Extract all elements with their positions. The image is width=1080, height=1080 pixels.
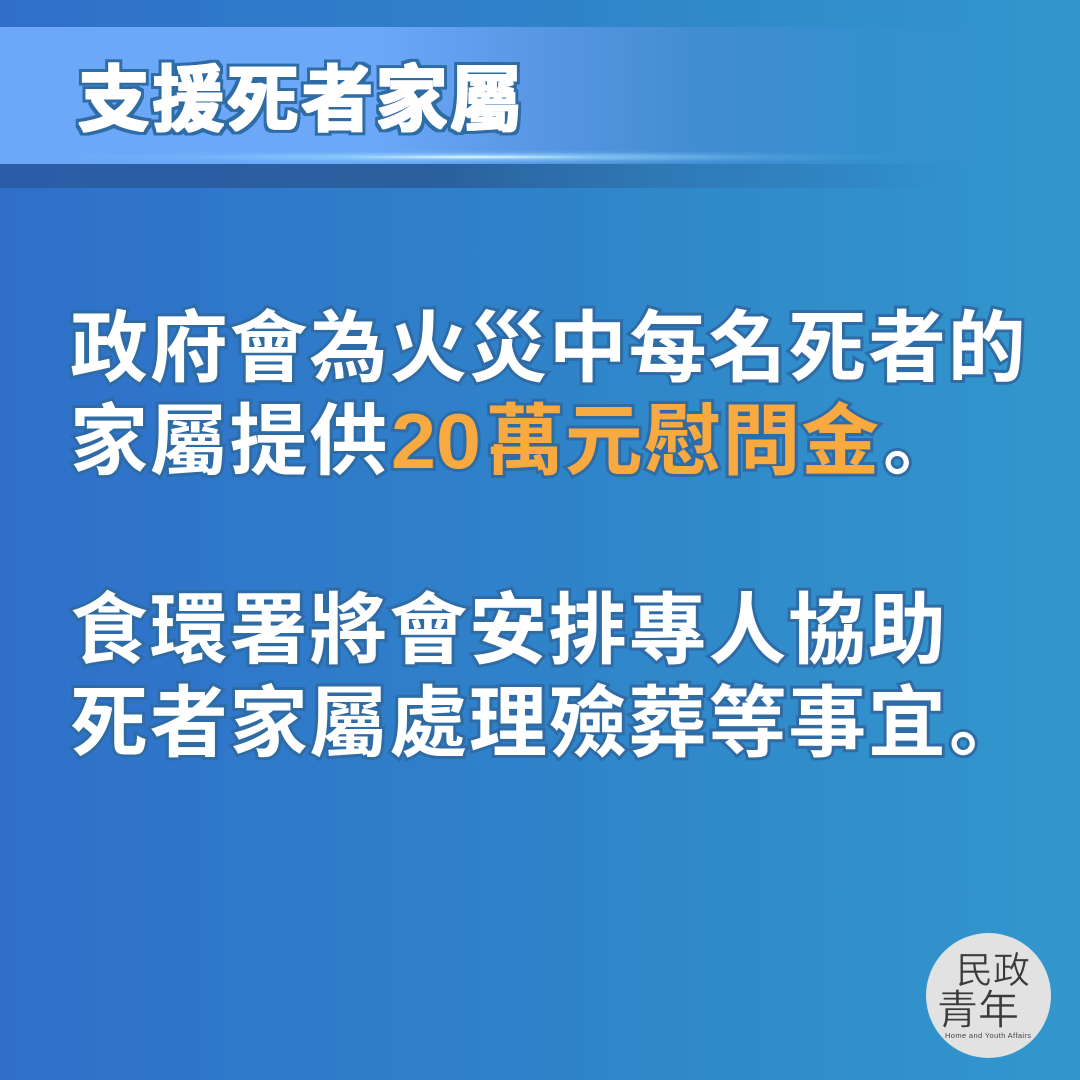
header light streak xyxy=(30,150,910,164)
paragraph 1: 家屬提供 xyxy=(70,397,389,485)
paragraph 1 xyxy=(70,304,1028,506)
paragraph 2: 。 xyxy=(927,707,999,787)
paragraph 2: 死者家屬處理殮葬等事宜 xyxy=(70,679,948,767)
header band xyxy=(0,27,1080,164)
logo: Home and Youth Affairs xyxy=(926,933,1051,1058)
paragraph 1: 萬元慰問金 xyxy=(486,397,880,485)
header band shadow xyxy=(0,164,1080,188)
logo: Home and Youth Affairs: Home and Youth Affairs xyxy=(945,1031,1031,1040)
paragraph 1: 。 xyxy=(861,426,933,506)
paragraph 2: 食環署將會安排專人協助 xyxy=(70,586,948,674)
logo: Home and Youth Affairs: 青年 xyxy=(937,987,1019,1033)
title: 支援死者家屬 xyxy=(78,61,522,141)
paragraph 2 xyxy=(70,586,999,787)
logo: Home and Youth Affairs: 民政 xyxy=(956,950,1030,991)
paragraph 1: 政府會為火災中每名死者的 xyxy=(70,304,1028,392)
paragraph 1: 20 xyxy=(391,397,481,485)
